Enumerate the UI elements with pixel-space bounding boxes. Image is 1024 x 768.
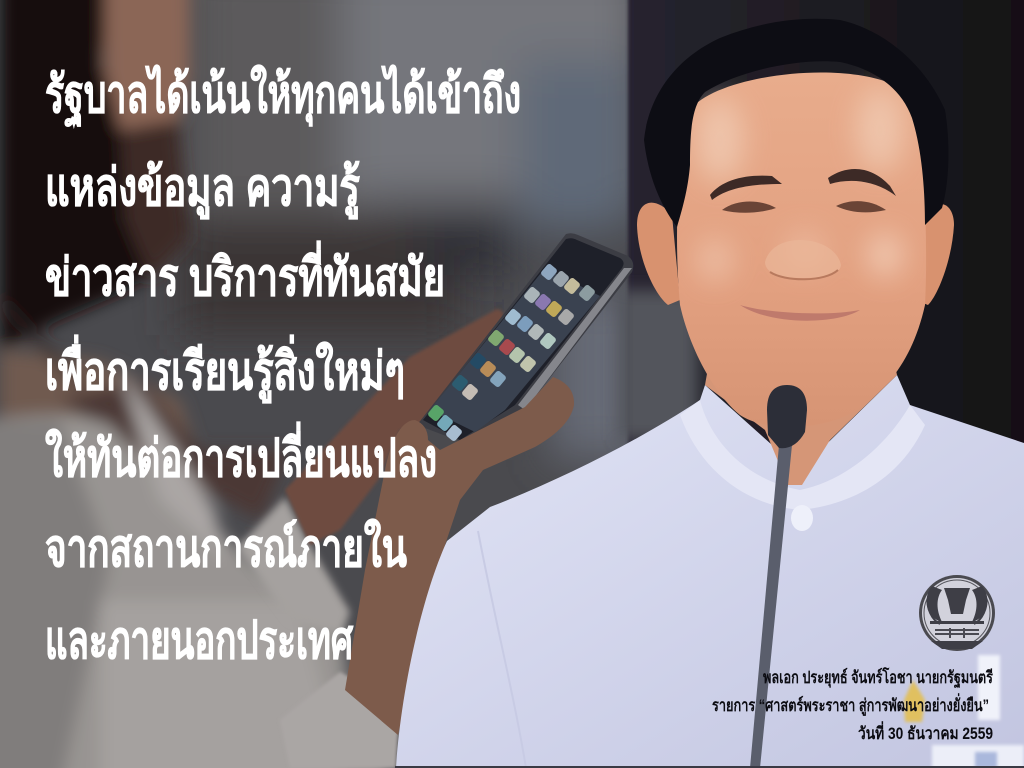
main headline: ข่าวสาร บริการที่ทันสมัย	[45, 241, 445, 307]
main headline: ให้ทันต่อการเปลี่ยนแปลง	[45, 422, 437, 488]
eyebrows	[710, 176, 782, 200]
main headline	[45, 64, 521, 670]
microphone	[750, 385, 807, 768]
button	[791, 505, 813, 531]
ears	[637, 203, 680, 305]
back of hand	[285, 309, 503, 545]
sleeve	[280, 672, 400, 768]
woman with hair and shirt, blurred behind text	[0, 0, 400, 768]
face	[677, 72, 926, 427]
eyes	[722, 202, 776, 213]
hair	[644, 19, 948, 227]
source caption: วันที่ 30 ธันวาคม 2559	[858, 721, 993, 743]
main headline: จากสถานการณ์ภายใน	[45, 518, 407, 578]
pocket highlights	[978, 655, 1000, 720]
thumb and palm in front of phone	[345, 377, 574, 735]
nose	[765, 240, 841, 278]
mouth	[740, 305, 860, 321]
white jacket	[396, 375, 1024, 768]
main headline: และภายนอกประเทศ	[45, 612, 354, 670]
medal	[904, 680, 925, 722]
cuff	[237, 497, 350, 635]
app icons	[427, 263, 596, 442]
source caption	[712, 667, 994, 743]
main headline: แหล่งข้อมูล ความรู้	[45, 159, 360, 220]
main headline: รัฐบาลได้เน้นให้ทุกคนได้เข้าถึง	[45, 64, 521, 128]
Prime Minister portrait	[395, 19, 1024, 768]
main headline: เพื่อการเรียนรู้สิ่งใหม่ๆ	[45, 335, 405, 404]
neck	[705, 300, 897, 485]
phone	[417, 233, 633, 445]
phone in hand	[285, 233, 633, 735]
jacket seam	[478, 531, 526, 768]
emblem: Thai government seal	[919, 575, 995, 651]
collar shading	[680, 400, 925, 510]
face highlights	[696, 88, 904, 282]
